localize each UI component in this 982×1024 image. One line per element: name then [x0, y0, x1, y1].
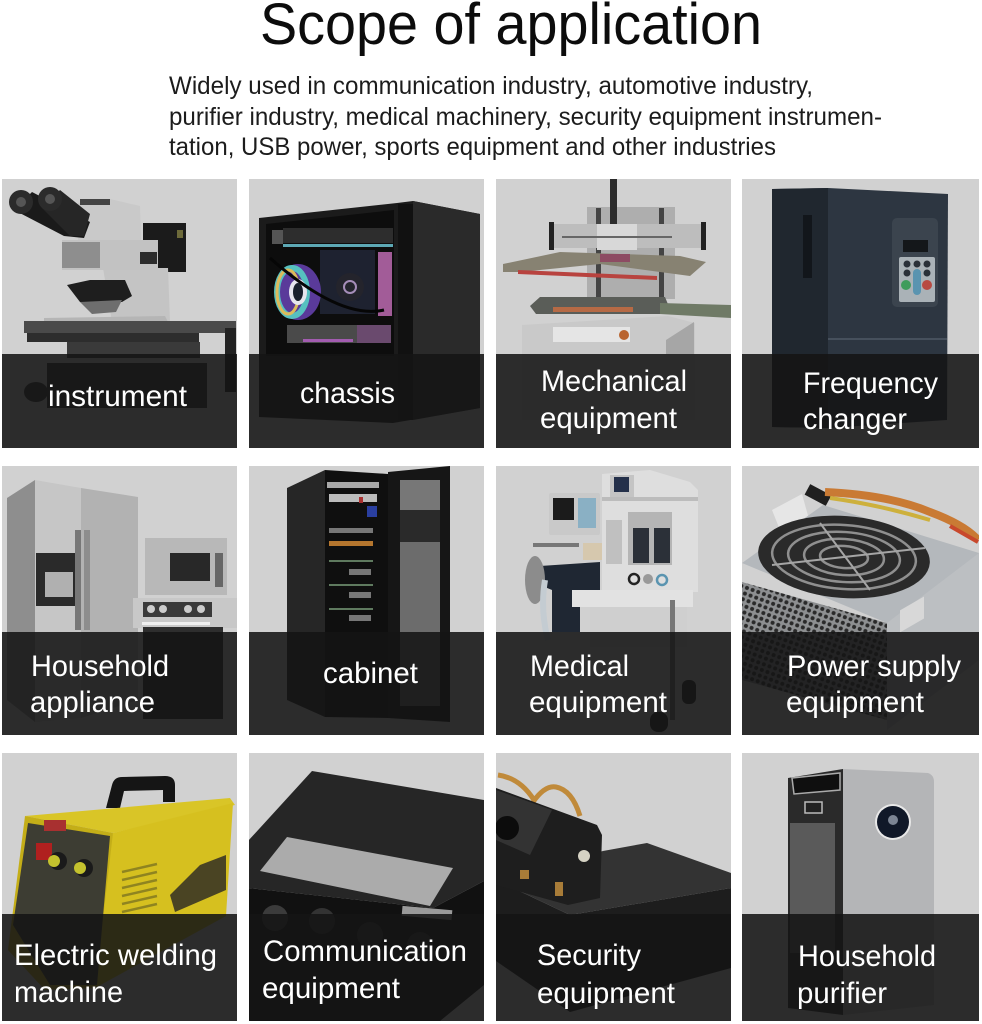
label: Security	[537, 939, 641, 972]
panel: electric welding machine	[2, 753, 237, 1021]
icon: welder	[8, 776, 235, 990]
icon: server rack	[287, 466, 450, 722]
panel: security equipment	[495, 753, 731, 1021]
label	[262, 935, 467, 1005]
intro text block	[169, 72, 882, 161]
label: cabinet	[323, 657, 418, 690]
label	[540, 365, 687, 435]
intro text block: tation, USB power, sports equipment and other industries	[169, 133, 776, 161]
intro text block: Widely used in communication industry, automotive industry,	[169, 72, 813, 100]
panel: chassis	[249, 179, 484, 448]
icon: purifier	[788, 769, 934, 1015]
label	[30, 650, 169, 719]
panel: mechanical equipment	[496, 178, 731, 448]
label: equipment	[537, 977, 675, 1010]
label	[804, 372, 938, 435]
label: Household	[31, 650, 169, 683]
icon: power supply unit	[742, 484, 979, 730]
label: Medical	[530, 650, 629, 683]
panel: household appliance	[2, 466, 237, 735]
label: equipment	[529, 686, 667, 719]
icon: microscope	[9, 187, 236, 408]
label: purifier	[797, 977, 887, 1010]
label: Communication	[263, 935, 467, 968]
panel: cabinet	[249, 466, 484, 735]
panel: power supply equipment	[742, 466, 979, 735]
panel: household purifier	[742, 753, 979, 1021]
icon: anesthesia machine	[525, 470, 698, 732]
panel: medical equipment	[496, 466, 731, 735]
label	[797, 940, 936, 1010]
label: Mechanical	[541, 365, 687, 398]
icon: camera module	[495, 775, 731, 1012]
label: equipment	[262, 972, 400, 1005]
label: Frequency	[803, 367, 938, 400]
label: Household	[798, 940, 936, 973]
label: machine	[14, 976, 123, 1009]
panel: instrument	[2, 179, 237, 448]
panel: communication equipment	[248, 753, 484, 1021]
icon: black box	[248, 771, 484, 1021]
label: changer	[803, 403, 907, 436]
label	[786, 650, 961, 719]
label	[529, 650, 667, 719]
label: chassis	[300, 377, 395, 410]
icon: inverter	[772, 188, 948, 428]
icon: fridge and oven	[7, 480, 237, 722]
label: equipment	[540, 402, 677, 435]
icon: PC case	[259, 201, 480, 423]
label: Electric welding	[14, 939, 217, 972]
label: instrument	[48, 380, 187, 413]
panel: frequency changer	[742, 179, 979, 448]
label: Power supply	[787, 650, 961, 683]
label: appliance	[30, 686, 155, 719]
intro text block: purifier industry, medical machinery, security equipment instrumen-	[169, 103, 882, 131]
label	[537, 939, 675, 1010]
label: equipment	[786, 686, 924, 719]
icon: screen printer	[503, 179, 731, 354]
label	[16, 944, 216, 1002]
